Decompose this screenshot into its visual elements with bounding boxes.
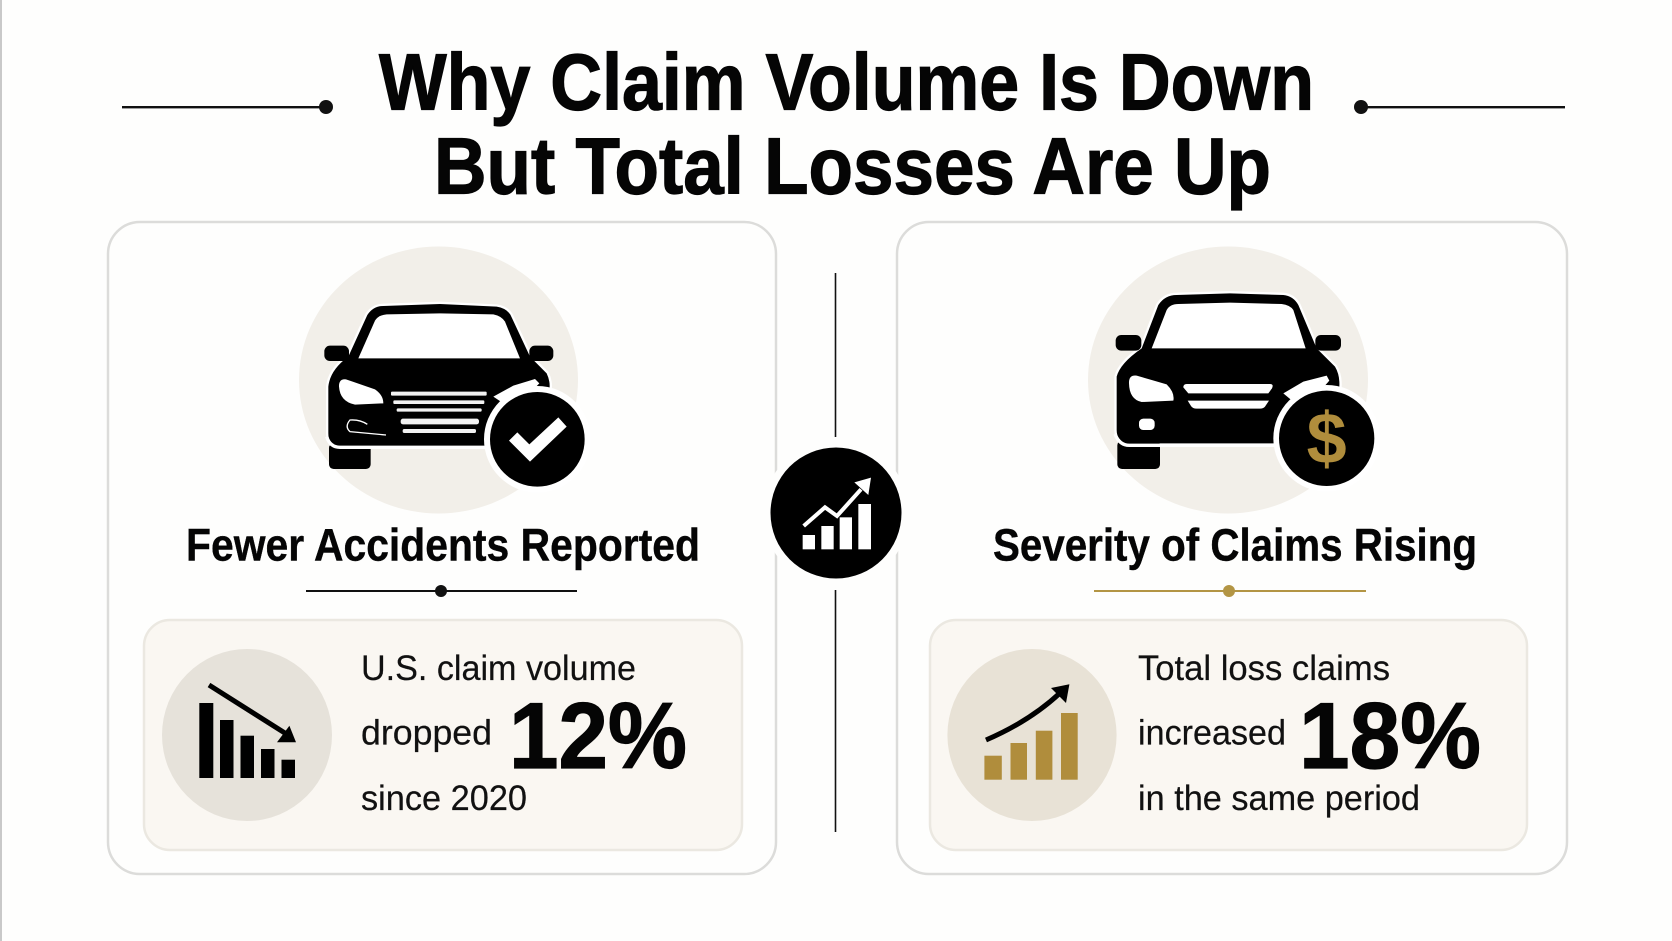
stat box: [930, 620, 1527, 850]
icon: car with check badge: [324, 304, 591, 493]
stat text: U.S. claim volume: [361, 649, 636, 688]
heading divider: [1094, 585, 1366, 597]
stat text: since 2020: [361, 779, 527, 818]
stat text: Total loss claims: [1138, 649, 1390, 688]
panel card: [897, 222, 1567, 874]
center badge: rising trend icon: [763, 440, 909, 586]
heading: Fewer Accidents Reported: [186, 520, 700, 570]
heading divider: [306, 585, 577, 597]
stat text: in the same period: [1138, 779, 1420, 818]
stat text: [1138, 649, 1420, 818]
stat box background: [930, 620, 1527, 850]
title: But Total Losses Are Up: [434, 122, 1271, 210]
title: [379, 38, 1314, 210]
icon backdrop circle: [299, 246, 578, 514]
panel: fewer accidents reported: [108, 222, 776, 874]
dollar sign: $: [1307, 399, 1347, 479]
icon backdrop circle: [1088, 246, 1368, 514]
title rule: right: [1354, 100, 1565, 114]
stat figure: 12%: [509, 683, 687, 788]
panel card: [108, 222, 776, 874]
heading: Severity of Claims Rising: [993, 520, 1477, 570]
stat box: [144, 620, 742, 850]
stat figure: 18%: [1299, 683, 1481, 788]
icon: rising gold bar chart: [947, 649, 1117, 821]
title: Why Claim Volume Is Down: [379, 38, 1314, 126]
stat text: dropped: [361, 714, 492, 752]
stat text: increased: [1138, 714, 1286, 752]
icon: car with dollar badge: [1115, 293, 1380, 492]
stat text: [361, 649, 636, 818]
center divider line: upper: [835, 273, 836, 437]
title rule: left: [122, 100, 333, 114]
stat box background: [144, 620, 742, 850]
icon: declining bar chart: [162, 649, 332, 821]
center divider line: lower: [835, 590, 836, 832]
panel: severity of claims rising: [897, 222, 1567, 874]
